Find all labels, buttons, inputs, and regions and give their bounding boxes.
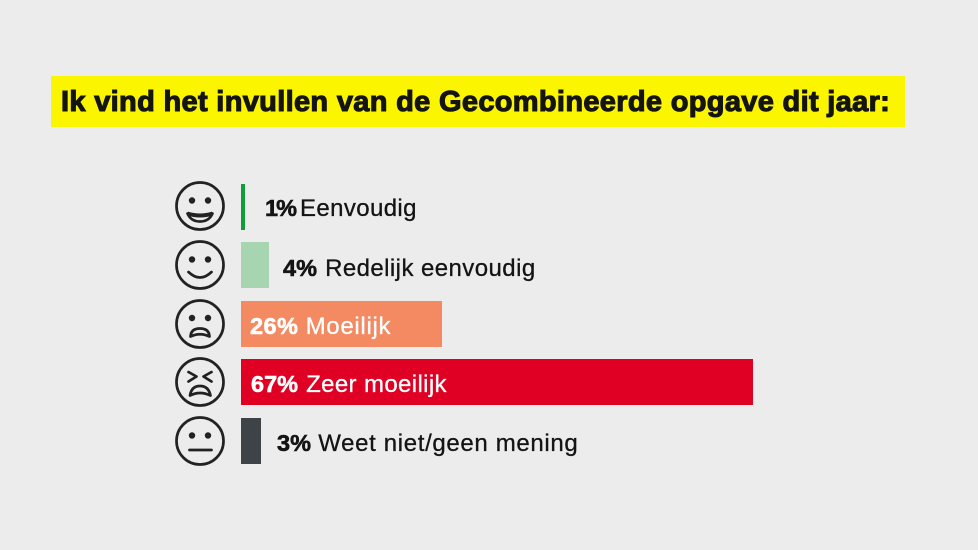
icon: smile bbox=[175, 240, 225, 290]
bar: Zeer moeilijk bbox=[241, 359, 753, 405]
bar: Moeilijk bbox=[241, 301, 442, 347]
label: Redelijk eenvoudig: 4% Redelijk eenvoudig bbox=[283, 255, 536, 282]
label: Zeer moeilijk: 67% Zeer moeilijk bbox=[251, 371, 447, 398]
icon: very upset bbox=[175, 357, 225, 407]
bar: Eenvoudig bbox=[241, 184, 245, 230]
icon: sad bbox=[175, 299, 225, 349]
icon: big smile bbox=[175, 181, 225, 231]
label: Eenvoudig: 1% Eenvoudig bbox=[265, 195, 417, 222]
title bbox=[51, 76, 905, 127]
label: Moeilijk: 26% Moeilijk bbox=[250, 313, 391, 340]
label: Weet niet/geen mening: 3% Weet niet/geen mening bbox=[277, 430, 578, 457]
icon: neutral bbox=[175, 416, 225, 466]
bar: Weet niet/geen mening bbox=[241, 418, 261, 464]
bar: Redelijk eenvoudig bbox=[241, 242, 269, 288]
title: Ik vind het invullen van de Gecombineerde opgave dit jaar: bbox=[61, 86, 890, 118]
